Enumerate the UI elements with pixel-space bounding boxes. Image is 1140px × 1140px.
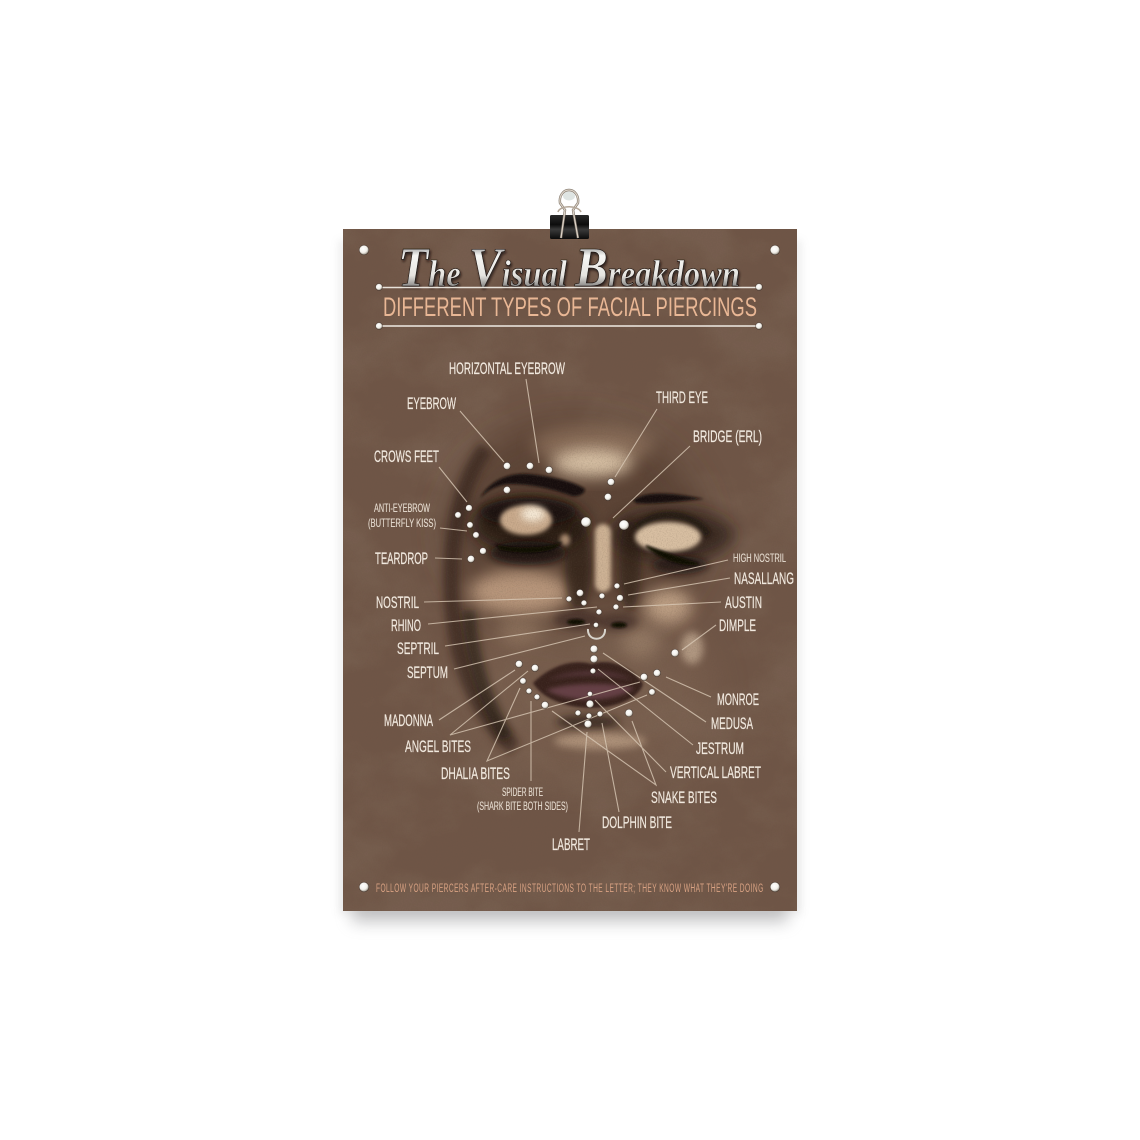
callout labels: VERTICAL LABRET [670, 763, 761, 782]
callout labels: SNAKE BITES [651, 788, 717, 807]
nose bridge highlight [595, 524, 611, 592]
callout labels: SEPTRIL [397, 639, 439, 658]
callout labels: TEARDROP [375, 549, 428, 568]
callout labels: NOSTRIL [376, 593, 419, 612]
callout labels: NASALLANG [734, 569, 794, 588]
callout labels: JESTRUM [696, 739, 744, 758]
illustrated face [436, 420, 742, 756]
callout labels: AUSTIN [725, 593, 762, 612]
subtitle with rules: DIFFERENT TYPES OF FACIAL PIERCINGS [383, 291, 757, 322]
callout labels: EYEBROW [407, 394, 456, 413]
callout labels: (SHARK BITE BOTH SIDES) [477, 799, 568, 813]
film grain [476, 444, 710, 749]
callout labels: (BUTTERFLY KISS) [368, 516, 436, 530]
callout labels: SEPTUM [407, 663, 448, 682]
callout labels: SPIDER BITE [502, 785, 543, 799]
title script: The Visual Breakdown [398, 237, 740, 299]
callout labels: THIRD EYE [656, 388, 708, 407]
cheeks and nose light [470, 570, 570, 614]
icon: binder clip [550, 190, 589, 239]
lashes [490, 541, 566, 565]
footer note: FOLLOW YOUR PIERCERS AFTER-CARE INSTRUCTIONS TO THE LETTER; THEY KNOW WHAT THEY'RE DOING [376, 882, 763, 896]
left eyelid [500, 505, 552, 535]
poster scene [338, 188, 802, 930]
callout labels: ANGEL BITES [405, 737, 471, 756]
right eyelid [635, 522, 701, 552]
callout labels: LABRET [552, 835, 590, 854]
callout labels: BRIDGE (ERL) [693, 427, 762, 446]
callout labels: MADONNA [384, 711, 433, 730]
callout labels: DHALIA BITES [441, 764, 510, 783]
callout labels: MEDUSA [711, 714, 753, 733]
callout labels: DIMPLE [719, 616, 756, 635]
callout labels: RHINO [391, 616, 421, 635]
callout labels [368, 359, 794, 854]
lips [533, 662, 643, 708]
nostrils [554, 610, 602, 630]
callout labels: DOLPHIN BITE [602, 813, 672, 832]
poster drop shadow [338, 240, 802, 922]
right eyebrow [633, 493, 704, 504]
callout labels: HORIZONTAL EYEBROW [449, 359, 565, 378]
poster background texture [343, 229, 797, 911]
piercing points [455, 462, 679, 728]
callout labels: ANTI-EYEBROW [374, 501, 430, 515]
callout labels: HIGH NOSTRIL [733, 551, 786, 565]
left eyebrow [480, 474, 585, 498]
corner rivets [359, 245, 780, 892]
forehead light [532, 425, 652, 465]
subtitle with rules [376, 284, 762, 329]
chin shadow and light [556, 715, 620, 729]
septum ring [588, 629, 605, 639]
leader lines [424, 379, 730, 832]
callout labels: CROWS FEET [374, 447, 439, 466]
callout labels: MONROE [717, 690, 759, 709]
hair edge [451, 448, 515, 748]
poster panel [343, 229, 797, 911]
eye sockets [472, 497, 588, 553]
